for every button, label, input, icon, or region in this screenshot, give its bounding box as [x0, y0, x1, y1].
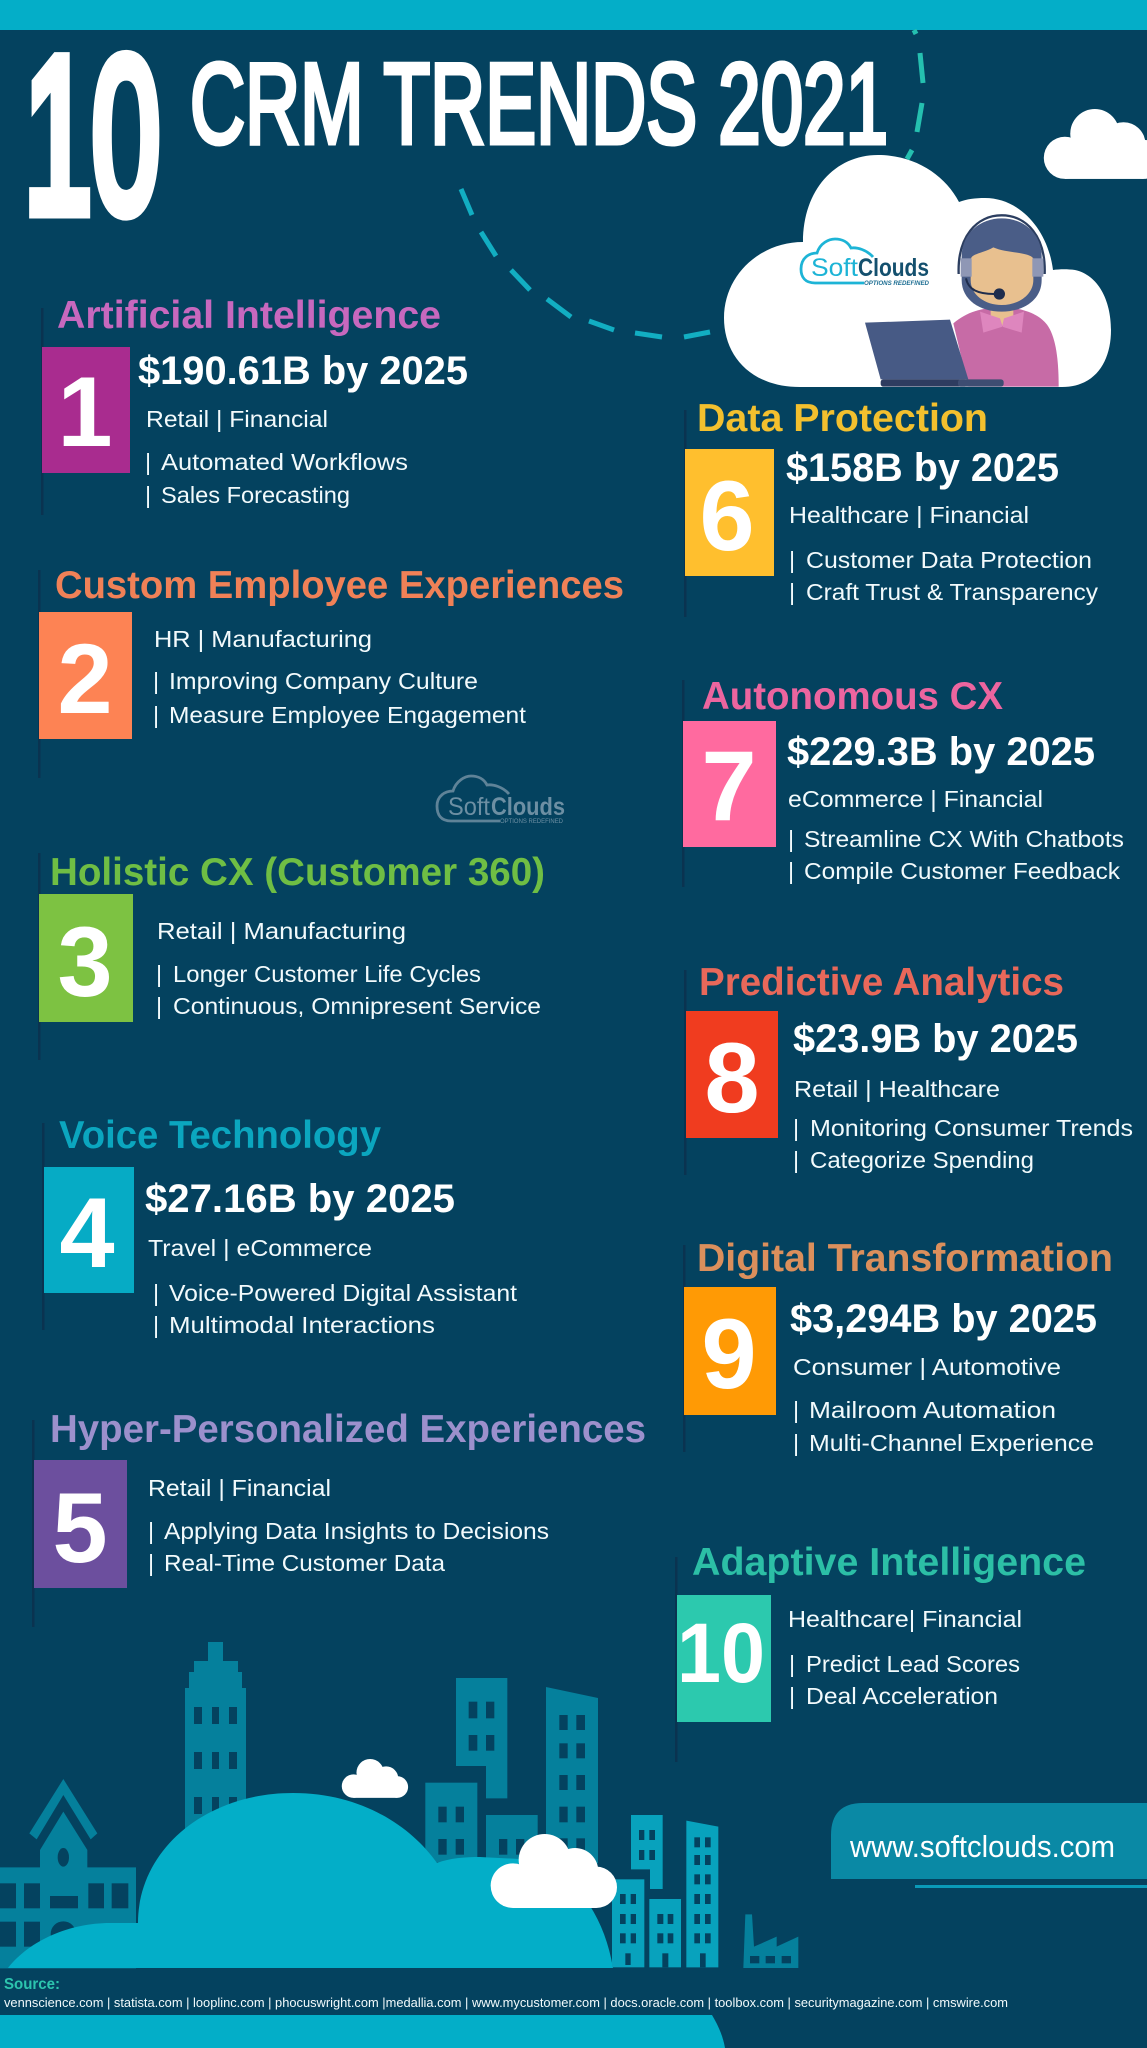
- website badge: [831, 1803, 1147, 1888]
- text block 8: Retail | Healthcare: [794, 1076, 1000, 1102]
- text block 9: Mailroom Automation: [809, 1397, 1056, 1423]
- text block 5: |: [148, 1550, 154, 1576]
- market value 8: $23.9B by 2025: [793, 1017, 1078, 1061]
- text block 8: Monitoring Consumer Trends: [810, 1115, 1133, 1141]
- text block 5: Applying Data Insights to Decisions: [164, 1518, 549, 1544]
- text block 6: Craft Trust & Transparency: [806, 579, 1098, 605]
- market value 6: $158B by 2025: [786, 446, 1059, 490]
- badge 5: [34, 1460, 127, 1588]
- badge 8: 8: [704, 1022, 760, 1133]
- text block 6: |: [789, 579, 795, 605]
- heading 5: Hyper-Personalized Experiences: [50, 1408, 646, 1451]
- badge 7: 7: [701, 730, 757, 841]
- heading 2: Custom Employee Experiences: [55, 564, 624, 607]
- badge 1: [42, 347, 130, 473]
- badge 4: [44, 1167, 134, 1293]
- text block 7: Streamline CX With Chatbots: [804, 826, 1124, 852]
- text block 10: Deal Acceleration: [806, 1683, 998, 1709]
- logo: SoftClouds: Clouds: [858, 254, 929, 282]
- text block 10: [788, 1606, 1022, 1709]
- panel: item 7 Autonomous CX: [682, 675, 1124, 887]
- market value 7: $229.3B by 2025: [787, 730, 1095, 774]
- text block 4: Travel | eCommerce: [148, 1235, 372, 1261]
- text block 4: [148, 1235, 517, 1338]
- text block 1: [145, 406, 408, 508]
- badge 10: 10: [677, 1606, 765, 1700]
- text block 9: [793, 1354, 1094, 1456]
- agent with headset and laptop: [865, 215, 1059, 387]
- badge 8: [686, 1011, 778, 1138]
- text block 8: Categorize Spending: [810, 1147, 1034, 1173]
- title number 10: 10: [24, 12, 160, 258]
- city skyline: [0, 1642, 798, 1968]
- text block 3: Longer Customer Life Cycles: [173, 961, 481, 987]
- heading 1: Artificial Intelligence: [57, 294, 441, 337]
- text block 7: |: [788, 826, 794, 852]
- small white cloud: [342, 1759, 408, 1798]
- hero cloud: [724, 155, 1111, 387]
- badge 3: [39, 894, 133, 1022]
- source block: [4, 1976, 1008, 2010]
- badge 2: 2: [57, 623, 113, 734]
- source block: vennscience.com | statista.com | looplinc.com | phocuswright.com |medallia.com | www.mycustomer.com | docs.oracle.com | toolbox.com | securitymagazine.com | cmswire.com: [4, 1995, 1008, 2010]
- badge 2: [39, 612, 132, 739]
- text block 4: Voice-Powered Digital Assistant: [169, 1280, 517, 1306]
- text block 2: Improving Company Culture: [169, 668, 478, 694]
- badge 6: 6: [699, 460, 755, 571]
- panel: item 2 Custom Employee Experiences: [38, 564, 624, 778]
- panel: item 10 Adaptive Intelligence: [675, 1541, 1086, 1762]
- heading 7: Autonomous CX: [702, 675, 1003, 718]
- watermark logo: Soft: [448, 793, 490, 821]
- text block 3: Retail | Manufacturing: [157, 918, 406, 944]
- panel: item 3 Holistic CX: [38, 851, 545, 1060]
- big white cloud: [491, 1834, 617, 1908]
- market value 1: $190.61B by 2025: [138, 349, 468, 393]
- text block 3: [156, 918, 541, 1019]
- text block 5: Retail | Financial: [148, 1475, 331, 1501]
- text block 1: Retail | Financial: [146, 406, 328, 432]
- heading 9: Digital Transformation: [697, 1237, 1113, 1280]
- text block 8: |: [793, 1147, 799, 1173]
- text block 2: Measure Employee Engagement: [169, 702, 526, 728]
- logo: SoftClouds: OPTIONS REDEFINED: [864, 280, 929, 287]
- text block 5: |: [148, 1518, 154, 1544]
- text block 5: [148, 1475, 549, 1576]
- text block 6: [789, 502, 1098, 605]
- panel: item 5 Hyper-Personalized Experiences: [32, 1408, 646, 1627]
- heading 6: Data Protection: [697, 397, 988, 440]
- text block 4: |: [153, 1280, 159, 1306]
- badge 4: 4: [59, 1177, 115, 1288]
- watermark logo: [437, 776, 565, 825]
- badge 9: [684, 1287, 776, 1415]
- text block 3: Continuous, Omnipresent Service: [173, 993, 541, 1019]
- text block 4: |: [153, 1312, 159, 1338]
- panel: item 6 Data Protection: [684, 397, 1098, 617]
- bottom cloud band: [0, 2015, 725, 2048]
- source block: Source:: [4, 1976, 60, 1993]
- logo: SoftClouds: Soft: [811, 254, 858, 282]
- front buildings: [612, 1815, 798, 1968]
- watermark logo: Clouds: [491, 793, 565, 821]
- text block 10: Healthcare| Financial: [788, 1606, 1022, 1632]
- text block 7: |: [788, 858, 794, 884]
- heading 8: Predictive Analytics: [699, 961, 1064, 1004]
- text block 3: |: [156, 961, 162, 987]
- church building: [0, 1779, 136, 1968]
- market value 4: $27.16B by 2025: [145, 1177, 455, 1221]
- cloud: top right: [1044, 109, 1147, 179]
- text block 9: |: [793, 1397, 799, 1423]
- text block 2: |: [153, 702, 159, 728]
- top band: [0, 0, 1147, 30]
- text block 9: |: [793, 1430, 799, 1456]
- website badge: www.softclouds.com: [849, 1829, 1115, 1864]
- dashed arc: [461, 30, 923, 337]
- text block 9: Multi-Channel Experience: [809, 1430, 1094, 1456]
- text block 10: |: [789, 1683, 795, 1709]
- badge 9: 9: [701, 1298, 757, 1409]
- logo: SoftClouds: [801, 239, 929, 287]
- text block 1: Sales Forecasting: [161, 482, 350, 508]
- text block 5: Real-Time Customer Data: [164, 1550, 446, 1576]
- text block 4: Multimodal Interactions: [169, 1312, 435, 1338]
- heading 4: Voice Technology: [59, 1114, 382, 1157]
- panel: item 1 Artificial Intelligence: [41, 294, 468, 515]
- text block 2: [153, 626, 526, 728]
- heading 3: Holistic CX (Customer 360): [50, 851, 545, 894]
- text block 6: |: [789, 547, 795, 573]
- text block 1: Automated Workflows: [161, 449, 408, 475]
- badge 1: 1: [57, 356, 113, 467]
- text block 9: Consumer | Automotive: [793, 1354, 1061, 1380]
- text block 2: |: [153, 668, 159, 694]
- text block 8: |: [793, 1115, 799, 1141]
- badge 7: [683, 721, 776, 847]
- panel: item 8 Predictive Analytics: [684, 961, 1133, 1175]
- heading 10: Adaptive Intelligence: [692, 1541, 1086, 1584]
- text block 7: Compile Customer Feedback: [804, 858, 1120, 884]
- badge 6: [685, 449, 774, 576]
- text block 10: |: [789, 1651, 795, 1677]
- badge 5: 5: [52, 1472, 108, 1583]
- text block 1: |: [145, 482, 151, 508]
- panel: item 9 Digital Transformation: [683, 1237, 1113, 1456]
- mid buildings: [425, 1678, 598, 1863]
- text block 7: [788, 786, 1124, 884]
- text block 2: HR | Manufacturing: [154, 626, 372, 652]
- panel: item 4 Voice Technology: [42, 1114, 517, 1338]
- large teal cloud: [8, 1793, 613, 1968]
- text block 6: Healthcare | Financial: [789, 502, 1029, 528]
- badge 3: 3: [57, 906, 113, 1017]
- tower building: [185, 1642, 246, 1830]
- text block 8: [793, 1076, 1133, 1173]
- watermark logo: OPTIONS REDEFINED: [500, 818, 563, 825]
- text block 1: |: [145, 449, 151, 475]
- text block 7: eCommerce | Financial: [788, 786, 1043, 812]
- text block 6: Customer Data Protection: [806, 547, 1092, 573]
- text block 3: |: [156, 993, 162, 1019]
- text block 10: Predict Lead Scores: [806, 1651, 1020, 1677]
- market value 9: $3,294B by 2025: [790, 1297, 1097, 1341]
